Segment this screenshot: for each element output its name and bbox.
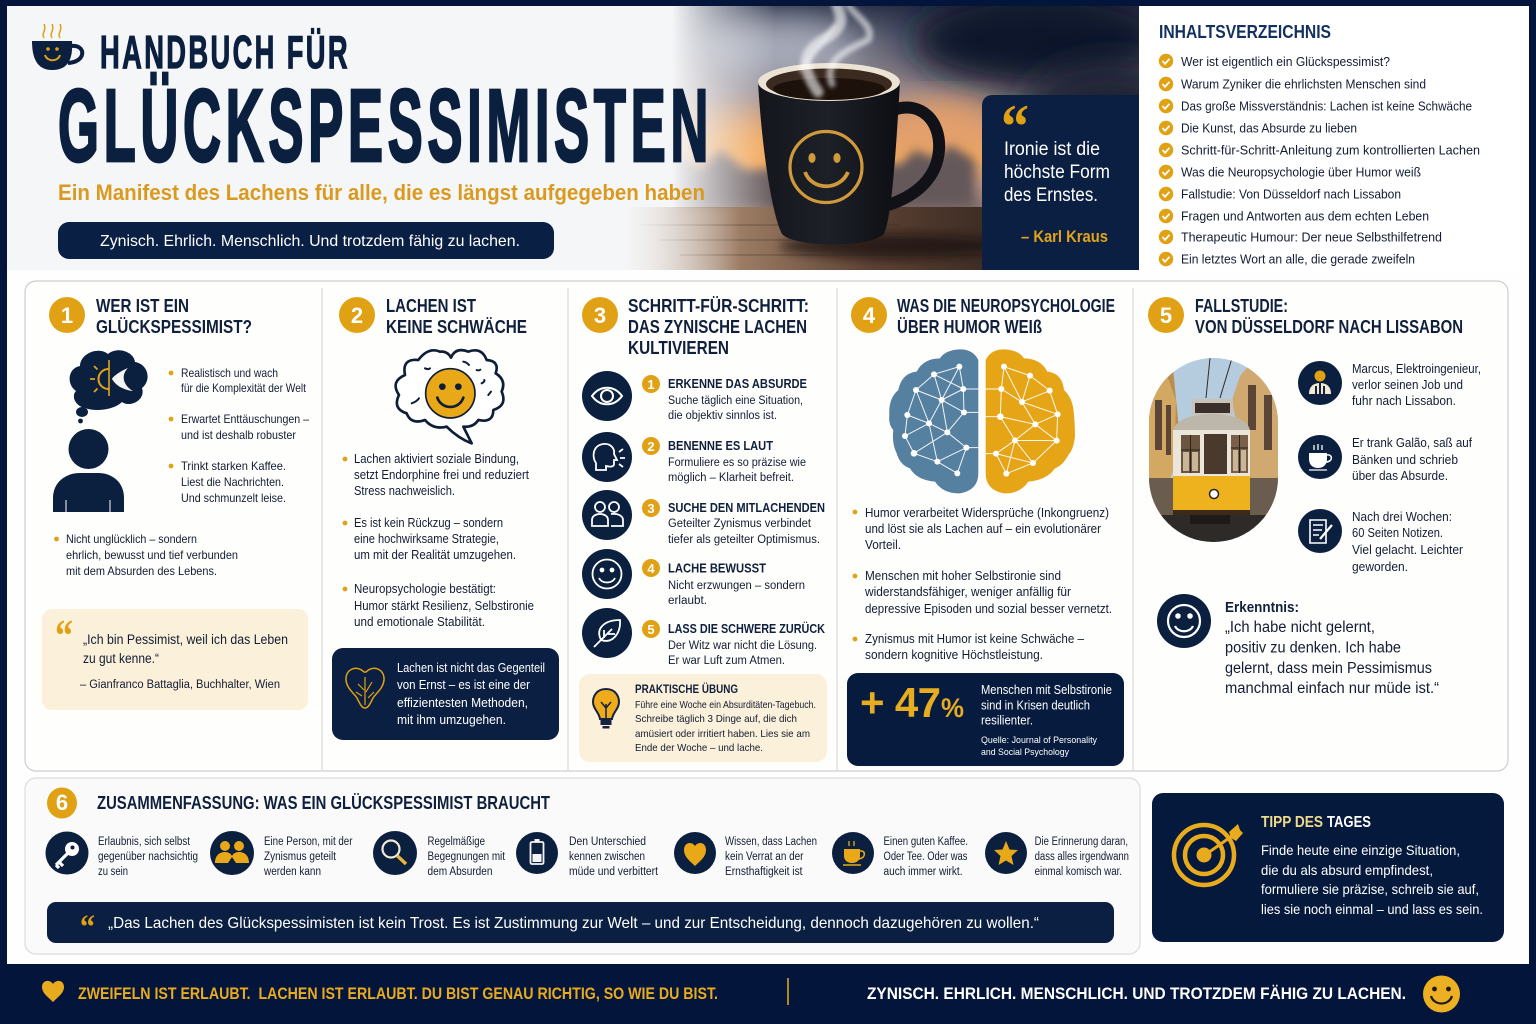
case step 2: über das Absurde. [1352,469,1448,483]
icon: engineer [1309,370,1331,394]
section 5: Fallstudie [1148,296,1481,697]
tip heading: TAGES [1327,814,1371,831]
heading 3: DAS ZYNISCHE LACHEN [628,317,807,337]
callout: Lachen und Ernst: mit ihm umzugehen. [397,713,506,727]
bullets 2 [343,452,534,629]
step 3: Geteilter Zynismus verbindet [668,518,812,530]
bullets 4: depressive Episoden und sozial besser vernetzt. [865,602,1112,616]
icon: key [56,842,79,868]
icon: heart [42,981,64,1002]
item: magnifier: dem Absurden [428,866,492,878]
stat callout: +47% [847,673,1124,766]
step 2 [582,432,806,484]
item: cup: auch immer wirkt. [884,866,962,878]
bullets 2: Humor stärkt Resilienz, Selbstironie [354,599,534,613]
insight: Erkenntnis: manchmal einfach nur müde ist.“ [1225,680,1439,697]
toc check icons [1159,54,1173,266]
icon: light bulb [593,689,619,728]
icon: battery [530,839,544,864]
icon: coffee surface [773,78,885,100]
step 3: SUCHE DEN MITLACHENDEN [668,500,825,515]
item: people [210,831,353,878]
section 4: Neuropsychologie [847,296,1124,766]
step 4: Nicht erzwungen – sondern [668,580,805,592]
hero banner [7,0,1200,271]
callout: Lachen und Ernst [332,648,559,740]
item: heart: Wissen, dass Lachen [725,836,817,848]
panel: Tipp des Tages [1152,793,1504,942]
quote bar: “ [80,909,95,946]
step 2: möglich – Klarheit befreit. [668,472,794,484]
badge 4: 4 [863,303,876,328]
stat callout: +47%: Menschen mit Selbstironie [981,683,1112,697]
bullets 2: um mit der Realität umzugehen. [354,548,516,562]
step 5: Der Witz war nicht die Lösung. [668,640,817,652]
case step 3: Nach drei Wochen: [1352,510,1452,524]
bullets 4: Zynismus mit Humor ist keine Schwäche – [865,632,1084,646]
case step 2: Bänken und schrieb [1352,453,1458,467]
item: heart [674,832,817,878]
tip body: Finde heute eine einzige Situation, [1261,842,1460,858]
step 4: LACHE BEWUSST [668,560,766,576]
bullet below person: Nicht unglücklich – sondern [66,532,197,546]
bullets 2: und emotionale Stabilität. [354,615,485,629]
insight: Erkenntnis [1157,594,1439,697]
toc entries: Das große Missverständnis: Lachen ist keine Schwäche [1181,98,1472,114]
icon: target with arrow [1174,824,1243,885]
section 2: Lachen ist keine Schwäche [332,296,559,740]
insight: Erkenntnis: „Ich habe nicht gelernt, [1225,619,1375,636]
toc entries: Wer ist eigentlich ein Glückspessimist? [1181,54,1390,69]
item: star: einmal komisch war. [1035,866,1122,878]
icon: magnifier [382,840,406,864]
bullet below person [54,532,238,578]
icon: brain with smiley [396,350,503,443]
bullets beside person: Und schmunzelt leise. [181,491,286,505]
icon: person with thought cloud [53,350,148,512]
case step 1: Marcus, Elektroingenieur, [1352,362,1481,376]
case step 3: geworden. [1352,560,1408,574]
heading 3 [628,296,809,358]
item: magnifier: Regelmäßige [428,836,485,848]
item: magnifier: Begegnungen mit [428,851,506,863]
item: heart: kein Verrat an der [725,851,804,863]
bullets 2: Stress nachweislich. [354,484,455,498]
item: heart: Ernsthaftigkeit ist [725,866,803,878]
insight: Erkenntnis: positiv zu denken. Ich habe [1225,640,1401,656]
toc entries [1181,54,1480,266]
icon: smiley [1168,605,1200,637]
callout: Battaglia quote: zu gut kenne.“ [83,651,159,666]
heading 2 [386,296,527,337]
bullets 2: setzt Endorphine frei und reduziert [354,468,529,482]
toc entries: Ein letztes Wort an alle, die gerade zweifeln [1181,252,1415,266]
icon: mug handle [888,108,939,205]
icon: mug body [758,82,900,244]
callout: Lachen und Ernst: effizientesten Methoden, [397,696,528,710]
bullets beside person: Erwartet Enttäuschungen – [181,412,309,426]
item: battery: müde und verbittert [569,866,659,878]
case step 1 [1298,361,1481,408]
bullets beside person: Trinkt starken Kaffee. [181,459,286,473]
stat callout: +47%: sind in Krisen deutlich [981,698,1090,712]
callout: Praktische Übung: amüsiert oder irritiert haben. Lies sie am [635,728,810,740]
quote panel: Karl Kraus: – Karl Kraus [1021,227,1108,246]
logo icon: smiling cup [32,24,82,70]
step 4: erlaubt. [668,595,707,607]
tagline pill [58,222,554,259]
step 4 [582,549,805,607]
bullets beside person: Liest die Nachrichten. [181,475,284,489]
bullets 2: Es ist kein Rückzug – sondern [354,516,503,530]
panel: main sections frame [25,281,1508,771]
stat callout: +47%: % [941,693,964,723]
callout: Praktische Übung [579,674,827,762]
heading 4: WAS DIE NEUROPSYCHOLOGIE [897,296,1115,316]
step 5: LASS DIE SCHWERE ZURÜCK [668,621,826,636]
item: people: Eine Person, mit der [264,836,353,848]
heading 5 [1195,296,1463,337]
toc entries: Warum Zyniker die ehrlichsten Menschen sind [1181,76,1426,92]
quote panel: Karl Kraus [982,93,1139,270]
step 5: 5 [647,622,655,637]
stat callout: +47%: resilienter. [981,714,1033,728]
step 3 [582,490,825,546]
bullets 2: Neuropsychologie bestätigt: [354,582,496,596]
step 5 [582,608,826,667]
icon: notepad [1310,520,1332,543]
step 1 [582,371,807,422]
tagline pill: Zynisch. Ehrlich. Menschlich. Und trotzdem fähig zu lachen. [100,233,520,250]
item: key [46,832,198,878]
item: battery: kennen zwischen [569,851,645,863]
item: star: Die Erinnerung daran, [1035,836,1128,848]
badge 1 [49,297,85,333]
badge 4 [851,297,887,333]
case step 3: 60 Seiten Notizen. [1352,526,1443,540]
bullets 4: widerstandsfähiger, weniger anfällig für [864,585,1071,599]
badge 2: 2 [351,303,363,328]
step 3: 3 [647,501,655,516]
panel: table of contents [1139,6,1529,274]
badge 5 [1148,297,1184,333]
case step 1: verlor seinen Job und [1352,378,1463,392]
bullets 4: Vorteil. [865,538,901,552]
heading 2: LACHEN IST [386,296,476,316]
heading 1 [96,296,252,337]
stat callout: +47%: + 47 [860,679,941,726]
heading 1: GLÜCKSPESSIMIST? [96,317,252,337]
icon: heart brain [346,668,384,708]
step 1: ERKENNE DAS ABSURDE [668,376,807,391]
case step 2: Er trank Galão, saß auf [1352,436,1472,450]
item: magnifier [373,831,506,878]
quote panel: Karl Kraus: des Ernstes. [1004,185,1098,206]
item: key: zu sein [98,866,128,878]
item: key: Erlaubnis, sich selbst [98,836,191,848]
bullets 2: Lachen aktiviert soziale Bindung, [354,452,519,466]
item: battery [516,832,659,878]
section 1: Wer ist ein Glückspessimist [42,296,309,710]
quote panel: Karl Kraus: Ironie ist die [1004,139,1100,160]
tip body [1261,842,1483,917]
icon: mug smiley [790,132,862,202]
tip heading: TIPP DES [1261,814,1323,831]
callout: Battaglia quote: “ [55,611,73,660]
heading 2: KEINE SCHWÄCHE [386,317,527,337]
heading 5: FALLSTUDIE: [1195,296,1288,316]
heading 3: SCHRITT-FÜR-SCHRITT: [628,296,809,316]
heading 5: VON DÜSSELDORF NACH LISSABON [1195,317,1463,337]
panel: section 6 Zusammenfassung [25,778,1140,954]
item: cup: Oder Tee. Oder was [884,851,968,863]
item: star: dass alles irgendwann [1035,851,1129,863]
bullets beside person: Realistisch und wach [181,366,278,380]
icon: star [994,841,1018,865]
icon: mug rim [758,63,900,101]
heading 3: KULTIVIEREN [628,338,729,358]
item: star [985,832,1129,878]
step 4: 4 [647,561,655,576]
insight: Erkenntnis: gelernt, dass mein Pessimismus [1225,660,1432,677]
icon: two people [592,502,623,526]
icon: leaf [594,620,620,647]
footer message left: ZWEIFELN IST ERLAUBT. LACHEN IST ERLAUBT. DU BIST GENAU RICHTIG, SO WIE DU BIST. [78,984,718,1003]
quote mark: “ [1001,93,1029,161]
bullets 4: Humor verarbeitet Widersprüche (Inkongruenz) [865,506,1109,520]
heading 4 [897,296,1115,337]
quote panel: Karl Kraus: höchste Form [1004,162,1110,183]
heading 6: ZUSAMMENFASSUNG: WAS EIN GLÜCKSPESSIMIST BRAUCHT [97,793,550,813]
icon: coffee cup [1309,444,1331,470]
icon: smiley outline [592,560,622,588]
steam [800,2,870,92]
tip heading [1261,814,1371,831]
item: people: werden kann [263,866,321,878]
bullet below person: mit dem Absurden des Lebens. [66,564,217,578]
callout: Battaglia quote: „Ich bin Pessimist, weil ich das Leben [83,632,288,647]
quote bar: „Das Lachen des Glückspessimisten ist kein Trost. Es ist Zustimmung zur Welt – und zur Entscheidung, dennoch dazugehören zu wollen.“ [108,915,1039,932]
icon: network brain [889,349,1075,493]
toc entries: Fallstudie: Von Düsseldorf nach Lissabon [1181,186,1401,202]
section 3: Schritt-für-Schritt [579,296,827,762]
callout: Praktische Übung: Schreibe täglich 3 Dinge auf, die dich [635,713,797,725]
icon: cup [843,841,864,865]
item: cup [832,832,968,878]
callout: Praktische Übung: Führe eine Woche ein Absurditäten-Tagebuch. [635,699,816,711]
item: key: gegenüber nachsichtig [98,851,198,863]
footer band [0,964,1536,1024]
step 2: Formuliere es so präzise wie [668,457,806,469]
tip body: die du als absurd empfindest, [1261,862,1433,878]
item: battery: Den Unterschied [569,836,646,848]
heading 4: ÜBER HUMOR WEIß [897,317,1042,337]
callout: Praktische Übung: PRAKTISCHE ÜBUNG [635,683,738,696]
case step 1: fuhr nach Lissabon. [1352,394,1456,408]
title line 2: GLÜCKSPESSIMISTEN [58,68,713,183]
hero photo: coffee mug at dusk [640,6,1139,270]
callout: Lachen und Ernst: von Ernst – es ist eine der [397,678,530,692]
icon: heart [684,843,706,866]
badge 3 [582,297,618,333]
toc entries: Fragen und Antworten aus dem echten Leben [1181,208,1429,224]
icon: eye [592,388,622,404]
toc entries: Was die Neuropsychologie über Humor weiß [1181,164,1421,180]
bullets beside person [169,366,309,505]
badge 6 [47,788,77,818]
step 1: Suche täglich eine Situation, [668,395,803,407]
bullet below person: ehrlich, bewusst und tief verbunden [66,548,238,562]
callout: Lachen und Ernst: Lachen ist nicht das Gegenteil [397,661,545,675]
title line 1: HANDBUCH FÜR [100,26,350,78]
item: cup: Einen guten Kaffee. [884,836,968,848]
bullets 4 [853,506,1112,662]
icon: speaking head [594,444,625,470]
bullets beside person: für die Komplexität der Welt [181,381,307,395]
step 1: die objektiv sinnlos ist. [668,410,777,422]
icon: smiley [1423,976,1460,1012]
case step 3: Viel gelacht. Leichter [1352,543,1463,557]
toc entries: Therapeutic Humour: Der neue Selbsthilfetrend [1181,230,1442,244]
tip body: formuliere sie präzise, schreib sie auf, [1261,881,1479,897]
icon: mug inner wall [766,68,892,93]
toc heading: INHALTSVERZEICHNIS [1159,21,1331,42]
heading 1: WER IST EIN [96,296,189,316]
step 2: BENENNE ES LAUT [668,438,773,453]
item: people: Zynismus geteilt [264,851,337,863]
badge 1: 1 [61,303,73,328]
bullets 4: Menschen mit hoher Selbstironie sind [865,569,1061,583]
callout: Battaglia quote [42,609,308,710]
bullets 4: sondern kognitive Höchstleistung. [865,648,1043,662]
step 2: 2 [647,439,655,454]
badge 5: 5 [1160,303,1172,328]
case step 3 [1298,509,1463,574]
bullets 4: und löst sie als Lachen auf – ein evolutionärer [865,522,1101,536]
toc entries: Schritt-für-Schritt-Anleitung zum kontrollierten Lachen [1181,142,1480,158]
case step 2 [1298,435,1472,483]
subtitle: Ein Manifest des Lachens für alle, die es längst aufgegeben haben [58,180,705,205]
insight: Erkenntnis: Erkenntnis: [1225,599,1299,616]
toc entries: Die Kunst, das Absurde zu lieben [1181,120,1357,136]
photo: Lisbon tram [1149,358,1278,542]
step 3: tiefer als geteilter Optimismus. [668,534,820,546]
footer message right: ZYNISCH. EHRLICH. MENSCHLICH. UND TROTZDEM FÄHIG ZU LACHEN. [867,984,1406,1003]
badge 3: 3 [594,303,606,328]
badge 2 [339,297,375,333]
bullets beside person: und ist deshalb robuster [181,428,296,442]
step 1: 1 [647,377,655,392]
icon: people [215,841,249,863]
bullets 2: eine hochwirksame Strategie, [354,532,499,546]
callout: Praktische Übung: Ende der Woche – und lache. [635,742,763,754]
stat callout: +47%: Quelle: Journal of Personality [981,735,1097,746]
stat callout: +47%: and Social Psychology [981,747,1069,758]
callout: Battaglia quote: – Gianfranco Battaglia, Buchhalter, Wien [80,679,280,691]
step 5: Er war Luft zum Atmen. [668,655,785,667]
quote bar [47,902,1114,946]
tip body: lies sie noch einmal – und lass es sein. [1261,901,1483,917]
badge 6: 6 [56,790,68,815]
